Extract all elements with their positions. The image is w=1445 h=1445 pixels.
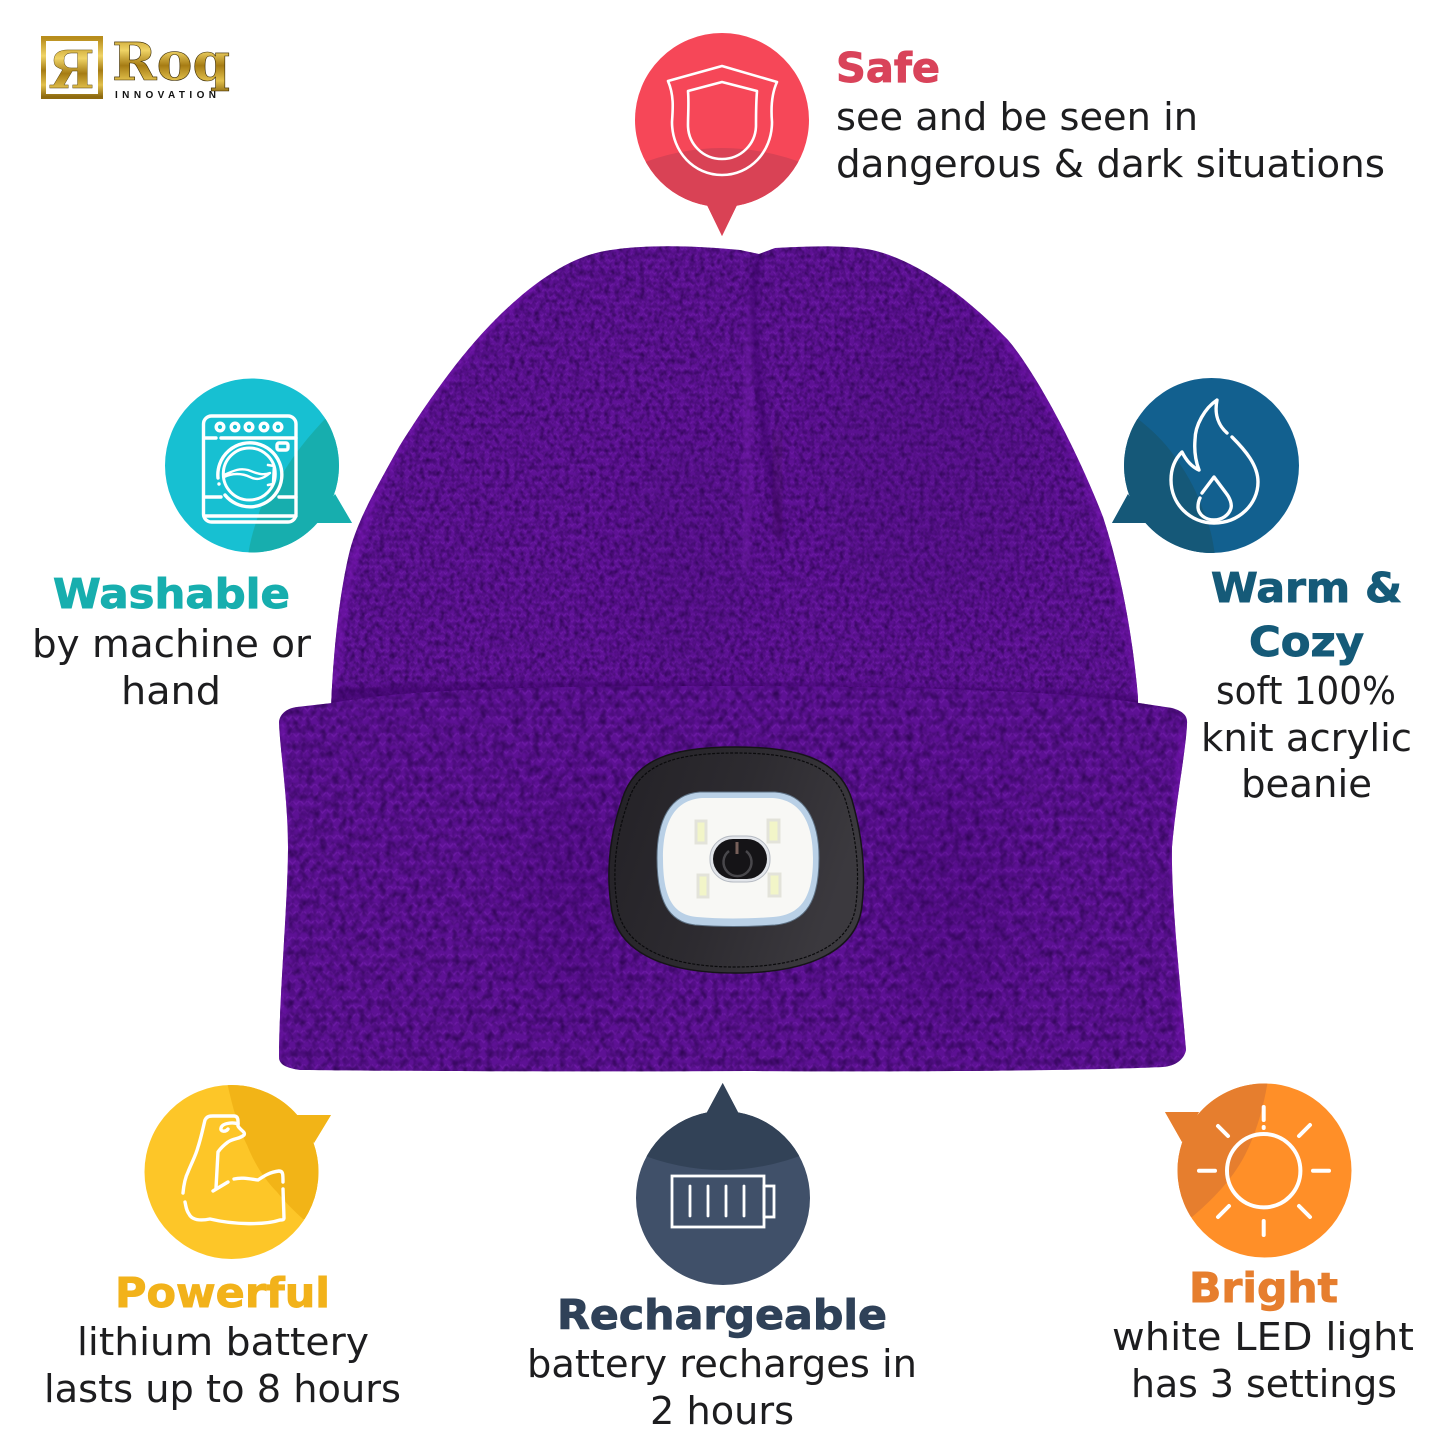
- bubble: Warm and Cozy: [1112, 378, 1299, 553]
- text: Bright: Bright: [1189, 1264, 1338, 1312]
- icon: sun: [1199, 1107, 1329, 1235]
- bubble: Bright: [1165, 1084, 1352, 1258]
- text: Bright: white LED light: [1112, 1315, 1414, 1359]
- text: Warm and Cozy: Cozy: [1249, 618, 1364, 666]
- text: Washable: by machine or: [32, 622, 311, 666]
- LED chips: [696, 820, 780, 897]
- text: Safe: [836, 44, 1385, 186]
- bubble: Rechargeable: [636, 1083, 810, 1285]
- black leather surround: [609, 747, 864, 973]
- logo: Roq Innovation: INNOVATION: [115, 90, 216, 101]
- LED light patch: [609, 747, 864, 973]
- text: Washable: [32, 570, 311, 713]
- icon: washing machine: [204, 416, 296, 522]
- text: Safe: Safe: [836, 44, 940, 92]
- text: Warm and Cozy: Warm &: [1211, 564, 1402, 612]
- text: Powerful: lithium battery: [77, 1320, 369, 1364]
- beanie: [270, 240, 1195, 1075]
- text: Rechargeable: Rechargeable: [557, 1291, 887, 1339]
- text: Rechargeable: 2 hours: [650, 1389, 794, 1433]
- LED lens: [657, 792, 819, 926]
- text: Bright: has 3 settings: [1131, 1362, 1397, 1406]
- icon: flexed arm: [183, 1116, 284, 1224]
- text: Washable: hand: [121, 669, 221, 713]
- text: Warm and Cozy: beanie: [1241, 762, 1372, 806]
- bubble: Powerful: [144, 1085, 331, 1259]
- bubble: Safe: [635, 33, 809, 236]
- power button: [710, 836, 770, 882]
- beanie folded cuff: [270, 680, 1195, 1075]
- logo: Roq Innovation: Я: [49, 40, 94, 101]
- text: Warm and Cozy: knit acrylic: [1201, 716, 1412, 760]
- text: Washable: Washable: [53, 570, 290, 618]
- icon: shield: [668, 66, 777, 175]
- text: Bright: [1112, 1264, 1414, 1406]
- text: Warm and Cozy: [1201, 564, 1412, 806]
- text: Rechargeable: [527, 1291, 917, 1433]
- beanie crown: [320, 240, 1150, 720]
- text: Powerful: Powerful: [115, 1269, 330, 1317]
- text: Powerful: lasts up to 8 hours: [44, 1367, 401, 1411]
- text: Safe: see and be seen in: [836, 95, 1198, 139]
- text: Warm and Cozy: soft 100%: [1216, 669, 1396, 713]
- bubble: Washable: [165, 378, 352, 552]
- text: Safe: dangerous & dark situations: [836, 142, 1385, 186]
- logo: Roq Innovation: Roq: [112, 32, 230, 93]
- icon: flame with droplet: [1171, 400, 1258, 523]
- logo: Roq Innovation: [44, 32, 230, 101]
- text: Rechargeable: battery recharges in: [527, 1342, 917, 1386]
- icon: battery: [672, 1176, 774, 1227]
- text: Powerful: [44, 1269, 401, 1411]
